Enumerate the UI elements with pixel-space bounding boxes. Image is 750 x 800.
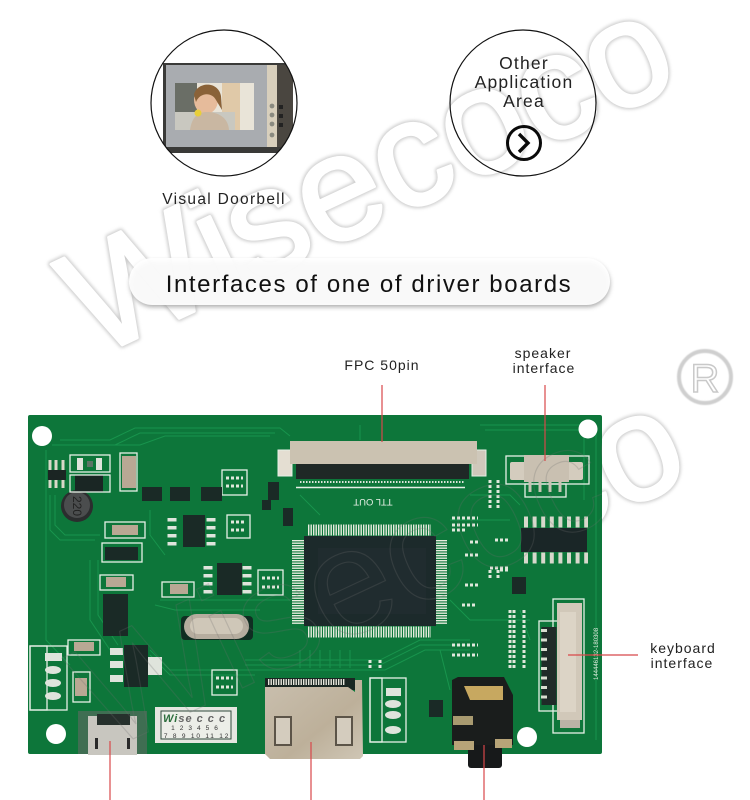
other area label: Area	[503, 91, 545, 111]
inductor	[61, 490, 93, 522]
sop16 chip	[521, 522, 588, 558]
wisecoco label: 123456	[171, 725, 223, 732]
other area label: Other	[499, 53, 549, 73]
watermark: Wisecoco	[48, 354, 708, 781]
label: keyboard interface: keyboard	[650, 640, 716, 656]
silkscreen TTL OUT: TTL OUT	[353, 496, 393, 507]
component pad clusters	[216, 478, 524, 687]
heading pill	[129, 258, 610, 307]
hdmi port	[265, 678, 363, 759]
sot components upper left	[48, 458, 103, 492]
white pads	[45, 648, 401, 734]
fpc 50pin connector	[278, 441, 486, 482]
application: visual doorbell	[151, 30, 297, 176]
keyboard connector	[544, 603, 582, 728]
wisecoco label: Wise c c c	[163, 713, 226, 725]
dark small ics	[103, 482, 526, 717]
label: speaker interface: speaker	[515, 345, 571, 361]
speaker connector	[510, 455, 583, 492]
beige capacitors	[74, 456, 188, 696]
label: visual doorbell: Visual Doorbell	[162, 191, 286, 208]
heading text: Interfaces of one of driver boards	[166, 271, 572, 298]
watermark: R	[691, 357, 719, 401]
soic chips	[172, 515, 247, 596]
icon: arrow in circle	[508, 126, 540, 160]
watermark: Wisecoco	[48, 354, 708, 781]
mounting holes	[32, 420, 598, 747]
label: FPC 50pin: FPC 50pin	[344, 357, 420, 373]
component pads	[30, 453, 589, 742]
pcb	[28, 415, 602, 754]
wisecoco label	[155, 707, 237, 743]
doorbell photo	[163, 63, 293, 153]
label: keyboard interface: interface	[651, 655, 713, 671]
callout labels	[344, 345, 716, 671]
micro usb port	[78, 711, 147, 755]
application: other area	[450, 30, 596, 176]
silkscreen part number: 144446132-180308	[594, 627, 600, 680]
watermark over board: Wisecoco	[48, 354, 708, 781]
callout lines	[110, 385, 638, 800]
inductor: 220	[70, 496, 84, 516]
crystal	[181, 614, 253, 640]
main processor	[298, 496, 441, 632]
wisecoco label: 7 8 9 10 11 12	[164, 733, 230, 740]
other area label: Application	[475, 72, 573, 92]
driver board	[28, 415, 602, 768]
traces	[46, 425, 596, 740]
label: speaker interface: interface	[513, 360, 575, 376]
audio jack	[452, 677, 513, 768]
